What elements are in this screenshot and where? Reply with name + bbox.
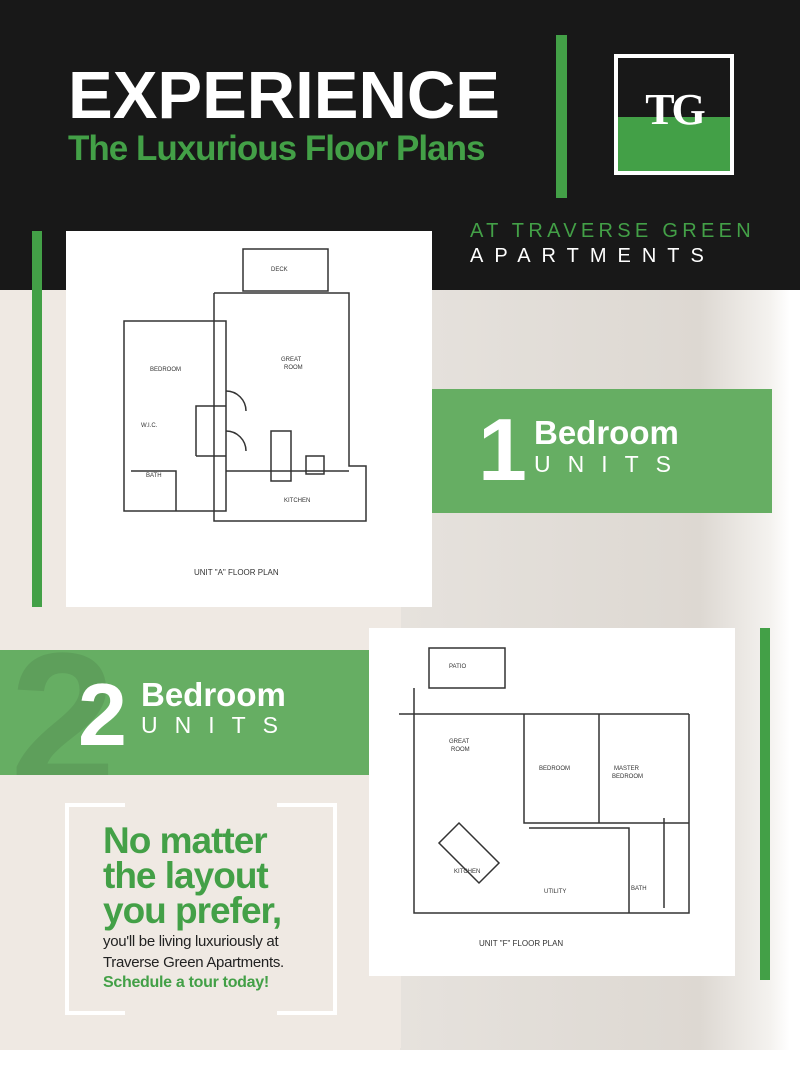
background photo area [0, 290, 800, 1050]
band: 1 bedroom: UNITS [534, 451, 688, 477]
band: 1 bedroom: 1 [478, 400, 527, 499]
floor plan 2: MASTER [614, 766, 640, 772]
floor plan 2: UTILITY [544, 889, 566, 895]
title: EXPERIENCE [68, 58, 500, 133]
floor plan 2: ROOM [451, 747, 470, 753]
band: 2 bedroom: 2 [78, 665, 127, 764]
band: 1 bedroom [432, 389, 772, 513]
callout quote: you prefer, [103, 890, 281, 931]
callout quote: the layout [103, 855, 268, 896]
floor plan 1: UNIT "A" FLOOR PLAN [194, 568, 279, 577]
accent bar right [760, 628, 770, 980]
location text: AT TRAVERSE GREEN [470, 220, 755, 242]
location text [470, 220, 755, 267]
accent bar left [32, 231, 42, 607]
band: 2 bedroom [0, 650, 369, 775]
subtitle: The Luxurious Floor Plans [68, 129, 484, 168]
logo: TG [645, 85, 703, 134]
floor plan 2: BEDROOM [612, 774, 643, 780]
floor plan 2: UNIT "F" FLOOR PLAN [479, 939, 563, 948]
callout quote: Schedule a tour today! [103, 974, 269, 991]
floor plan 2 [369, 628, 735, 976]
logo [614, 54, 734, 175]
beige panel [31, 290, 401, 1048]
floor plan 2: GREAT [449, 739, 470, 745]
floor plan 2: BEDROOM [539, 766, 570, 772]
floor plan 2: BATH [631, 886, 647, 892]
band: 1 bedroom: Bedroom [534, 414, 679, 451]
floor plan 1: ROOM [284, 365, 303, 371]
divider bar [556, 35, 567, 198]
floor plan 2: KITCHEN [454, 869, 480, 875]
callout quote [65, 803, 337, 1015]
floor plan 1: BEDROOM [150, 367, 181, 373]
header [0, 0, 800, 290]
floor plan 2: PATIO [449, 664, 466, 670]
callout quote: No matter [103, 820, 267, 861]
band: 2 bedroom: Bedroom [141, 676, 286, 713]
callout quote: Traverse Green Apartments. [103, 954, 284, 971]
floor plan 1 [66, 231, 432, 607]
floor plan 1: DECK [271, 267, 288, 273]
band: 2 bedroom: UNITS [141, 712, 295, 738]
floor plan 1: BATH [146, 473, 162, 479]
floor plan 1: W.I.C. [141, 423, 158, 429]
floor plan 1: KITCHEN [284, 498, 310, 504]
callout quote: you'll be living luxuriously at [103, 933, 278, 950]
title [68, 58, 500, 168]
location text: APARTMENTS [470, 245, 715, 267]
floor plan 1: GREAT [281, 357, 302, 363]
